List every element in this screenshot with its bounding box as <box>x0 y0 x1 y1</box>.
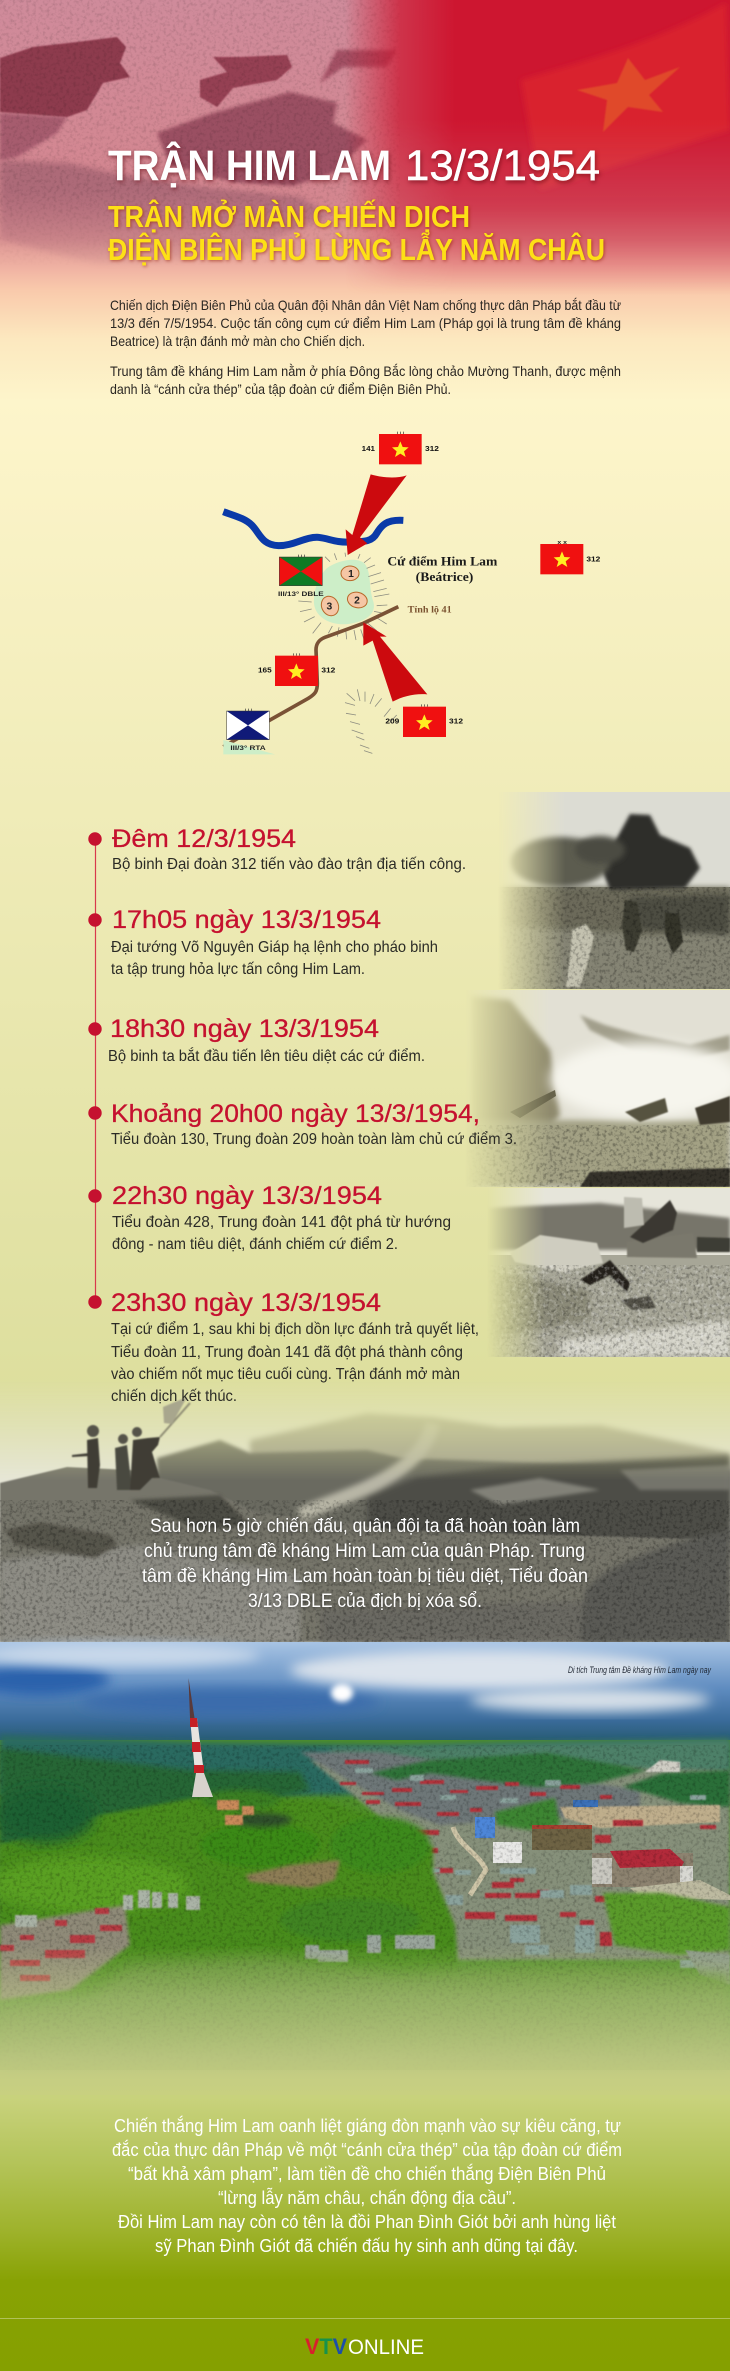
title: TRẬN HIM LAM <box>108 141 391 190</box>
flag: regiment 141 <box>362 432 439 464</box>
event: 17h05 <box>88 906 438 978</box>
event: 20h00: Khoảng 20h00 ngày 13/3/1954, <box>111 1100 480 1128</box>
aerial: TV tower <box>188 1678 213 1797</box>
event: 18h30: Bộ binh ta bắt đầu tiến lên tiêu diệt các cứ điểm. <box>108 1046 425 1065</box>
intro text: Trung tâm đề kháng Him Lam nằm ở phía Đông Bắc lòng chảo Mường Thanh, được mệnh <box>110 363 621 379</box>
logo: VTV Online: ONLINE <box>348 2336 424 2359</box>
title: 13/3/1954 <box>405 142 600 190</box>
flag: III/3 RTA <box>227 709 269 752</box>
photo: artillery smoke <box>460 990 730 1187</box>
arrow: north attack <box>346 474 407 555</box>
map: road <box>223 607 398 747</box>
flag: division 312: x x <box>557 540 568 546</box>
map: strongpoints: 1 <box>348 569 354 580</box>
aerial: large red-roof hall <box>592 1849 693 1887</box>
map: strongpoints <box>318 566 369 619</box>
flag: regiment 209: 312 <box>449 719 463 726</box>
event: 18h30 <box>88 1015 425 1065</box>
intro text <box>110 297 621 397</box>
aerial: fade to green <box>0 1945 730 2095</box>
event: 23h30: 23h30 ngày 13/3/1954 <box>111 1289 381 1317</box>
timeline <box>88 825 517 1405</box>
aerial: plaza <box>630 1880 730 1900</box>
flag: regiment 165: 165 <box>258 668 272 675</box>
event: 17h05: 17h05 ngày 13/3/1954 <box>112 906 381 934</box>
flag: regiment 209 <box>385 704 463 737</box>
event: 22h30: đông - nam tiêu diệt, đánh chiếm cứ điểm 2. <box>112 1235 398 1253</box>
closing text: Đồi Him Lam nay còn có tên là đồi Phan Đình Giót bởi anh hùng liệt <box>118 2211 616 2232</box>
battle conclusion text <box>142 1516 588 1612</box>
flag: regiment 165 <box>258 653 335 686</box>
event: 22h30: Tiểu đoàn 428, Trung đoàn 141 đột phá từ hướng <box>112 1213 451 1231</box>
aerial: blue long roof <box>573 1800 598 1807</box>
battle conclusion text: chủ trung tâm đề kháng Him Lam của quân Pháp. Trung <box>144 1541 585 1562</box>
photo: aircraft wreck <box>485 1188 730 1357</box>
flag: regiment 141: 312 <box>425 446 439 453</box>
flag: III/13 DBLE: III/13° DBLE <box>278 590 324 598</box>
photo: infantry advancing under smoke <box>490 792 730 989</box>
event: 22h30 <box>88 1182 451 1253</box>
closing text: “bất khả xâm phạm”, làm tiền đề cho chiến thắng Điện Biên Phủ <box>128 2163 606 2184</box>
arrow: south attack <box>363 622 427 702</box>
soldiers with flag <box>72 1397 190 1490</box>
event: 23h30: Tiểu đoàn 11, Trung đoàn 141 đã đột phá thành công <box>111 1343 463 1361</box>
event: 18h30: 18h30 ngày 13/3/1954 <box>110 1015 379 1043</box>
event: 23h30: chiến dịch kết thúc. <box>111 1388 237 1405</box>
battle conclusion text: Sau hơn 5 giờ chiến đấu, quân đội ta đã hoàn toàn làm <box>150 1516 580 1537</box>
photo: aerial view of Him Lam today <box>0 1642 730 2095</box>
title <box>108 141 600 190</box>
hero banner <box>0 0 730 320</box>
map label: Him Lam strongpoint <box>387 553 498 584</box>
flag: III/3 RTA: III/3° RTA <box>230 744 266 752</box>
closing text: sỹ Phan Đình Giót đã chiến đấu hy sinh anh dũng tại đây. <box>155 2235 578 2256</box>
aerial: houses lower left <box>0 1890 435 2000</box>
flag: division 312 <box>540 540 600 574</box>
map label: Him Lam strongpoint: Cứ điểm Him Lam <box>387 553 498 568</box>
flag: regiment 209: 209 <box>385 719 399 726</box>
aerial: road <box>453 1827 486 1895</box>
red flag wash <box>350 0 730 290</box>
aerial: hotel <box>532 1825 592 1850</box>
event: 20h00 <box>88 1100 517 1148</box>
timeline axis <box>94 839 96 1302</box>
event: 17h05: ta tập trung hỏa lực tấn công Him Lam. <box>111 961 365 978</box>
event: 23h30: vào chiếm nốt mục tiêu cuối cùng. Trận đánh mở màn <box>111 1366 460 1383</box>
flag: regiment 141: 141 <box>362 446 375 453</box>
map: strongpoints: 3 <box>326 602 332 613</box>
event: night of 12/3/1954: Bộ binh Đại đoàn 312 tiến vào đào trận địa tiến công. <box>112 856 466 873</box>
flag: III/13 DBLE <box>278 555 324 598</box>
aerial: right trees <box>603 1893 730 1955</box>
flag: regiment 165: 312 <box>321 668 335 675</box>
aerial: houses near tower <box>217 1800 254 1825</box>
closing text: đắc của thực dân Pháp về một “cánh cửa thép” của tập đoàn cứ điểm <box>112 2139 622 2160</box>
event: 22h30: 22h30 ngày 13/3/1954 <box>112 1182 382 1210</box>
closing text: “lừng lẫy năm châu, chấn động địa cầu”. <box>218 2187 516 2208</box>
logo: VTV Online <box>305 2334 424 2359</box>
map: river <box>223 512 403 546</box>
battle map <box>223 432 600 754</box>
event: night of 12/3/1954 <box>88 825 466 873</box>
event: 23h30: Tại cứ điểm 1, sau khi bị địch dồn lực đánh trả quyết liệt, <box>111 1320 479 1338</box>
subtitle: TRẬN MỞ MÀN CHIẾN DỊCH <box>108 198 470 234</box>
intro text: danh là “cánh cửa thép” của tập đoàn cứ điểm Điện Biên Phủ. <box>110 381 451 397</box>
map label: Him Lam strongpoint: (Beátrice) <box>416 569 473 584</box>
map: hachures <box>298 553 397 753</box>
aerial: distant valley and hills <box>0 1735 730 1795</box>
aerial: blue building <box>475 1817 495 1838</box>
photo: flag raised over Him Lam <box>0 1372 730 1642</box>
aerial: dark hill left <box>0 1748 310 1845</box>
intro text: Beatrice) là trận đánh mở màn cho Chiến dịch. <box>110 333 365 349</box>
aerial: base land <box>0 1740 730 2070</box>
event: 17h05: Đại tướng Võ Nguyên Giáp hạ lệnh cho pháo binh <box>111 939 438 956</box>
map: Him Lam hill <box>314 560 374 624</box>
aerial: lower right houses <box>685 1950 730 1985</box>
icon: flag star <box>577 58 680 132</box>
event: night of 12/3/1954: Đêm 12/3/1954 <box>112 825 296 853</box>
subtitle: ĐIỆN BIÊN PHỦ LỪNG LẪY NĂM CHÂU <box>108 231 605 267</box>
aerial: foreground vegetation <box>0 1955 730 2070</box>
mountain silhouettes <box>0 0 400 265</box>
map: strongpoints: 2 <box>354 595 360 606</box>
logo: VTV Online: VTV <box>305 2334 347 2359</box>
intro text: 13/3 đến 7/5/1954. Cuộc tấn công cụm cứ điểm Him Lam (Pháp gọi là trung tâm đề kháng <box>110 315 621 331</box>
event: 20h00: Tiểu đoàn 130, Trung đoàn 209 hoàn toàn làm chủ cứ điểm 3. <box>111 1130 517 1148</box>
aerial: town rooftops <box>340 1760 726 1965</box>
flag: division 312: 312 <box>586 557 600 564</box>
map: green base under RTA flag <box>223 740 275 754</box>
aerial: white building <box>493 1842 522 1863</box>
aerial: sky <box>0 1642 730 1747</box>
intro text: Chiến dịch Điện Biên Phủ của Quân đội Nhân dân Việt Nam chống thực dân Pháp bắt đầu từ <box>110 297 621 313</box>
event: 23h30 <box>88 1289 479 1405</box>
map label: road 41: Tỉnh lộ 41 <box>408 605 452 616</box>
aerial: Him Lam hill <box>0 1787 460 2000</box>
battle conclusion text: tâm đề kháng Him Lam hoàn toàn bị tiêu diệt, Tiểu đoàn <box>142 1566 588 1587</box>
subtitle <box>108 198 605 267</box>
closing text: Chiến thắng Him Lam oanh liệt giáng đòn mạnh vào sự kiêu căng, tự <box>114 2115 621 2136</box>
aerial: town <box>300 1752 730 1985</box>
battle conclusion text: 3/13 DBLE của địch bị xóa sổ. <box>248 1591 482 1612</box>
closing text <box>112 2115 622 2256</box>
